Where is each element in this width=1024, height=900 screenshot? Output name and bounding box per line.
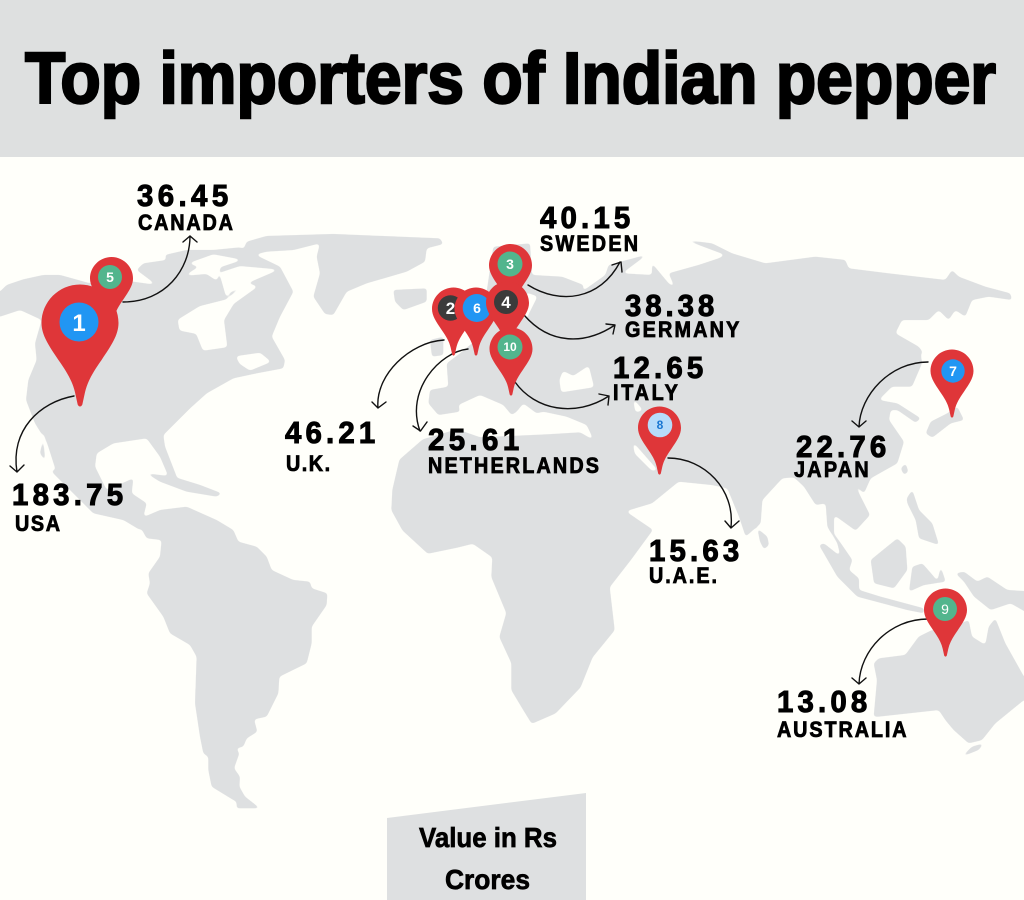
North America <box>0 234 443 530</box>
label: UK: 46.21 <box>285 416 375 450</box>
label: Netherlands <box>428 423 599 478</box>
label: Germany <box>625 289 739 342</box>
pin 3: Sweden: 3 <box>506 256 514 272</box>
pin 2: UK: 2 <box>446 299 455 318</box>
arrow: UK <box>372 340 444 408</box>
arrow: Netherlands <box>413 349 468 431</box>
arrow: UAE <box>668 458 739 528</box>
label: Italy: ITALY <box>613 381 678 405</box>
label: UAE <box>649 534 739 588</box>
arrow: Italy <box>515 382 609 409</box>
pin 4: Germany: 4 <box>501 293 511 312</box>
pin 6: Netherlands <box>454 288 498 356</box>
Eurasia <box>428 240 1012 613</box>
Iceland <box>393 288 427 310</box>
pin 4: Germany <box>486 282 529 350</box>
unit note <box>387 793 586 900</box>
label: Japan <box>794 430 886 482</box>
label: USA <box>12 478 123 536</box>
arrow: Australia <box>852 619 928 684</box>
label: Netherlands: NETHERLANDS <box>428 454 599 478</box>
pin 8: UAE <box>638 406 681 475</box>
pin 1: USA: 1 <box>72 310 86 337</box>
pin 5: Canada: 5 <box>106 269 114 285</box>
pin 2: UK <box>432 288 475 356</box>
arrow: USA <box>10 396 74 472</box>
label: UK <box>285 416 375 476</box>
Africa <box>392 430 652 723</box>
pin 6: Netherlands: 6 <box>473 300 481 316</box>
arrow: Japan <box>852 362 928 427</box>
arrow: Germany <box>524 315 615 339</box>
pin 7: Japan: 7 <box>949 363 957 379</box>
label: USA: USA <box>15 512 60 536</box>
label: Australia <box>777 685 907 742</box>
pin 9: Australia <box>924 588 967 657</box>
label: Australia: AUSTRALIA <box>777 718 907 742</box>
label: Canada: CANADA <box>138 211 233 235</box>
label: Germany: 38.38 <box>625 289 714 323</box>
arrow: Canada <box>123 236 197 302</box>
label: Japan: 22.76 <box>796 430 886 464</box>
label: UK: U.K. <box>286 452 330 476</box>
label: Germany: GERMANY <box>625 318 739 342</box>
pin 5: Canada <box>90 257 133 325</box>
unit note: Crores <box>445 864 530 895</box>
label: Japan: JAPAN <box>794 458 869 482</box>
label: Australia: 13.08 <box>777 685 867 719</box>
title banner <box>0 0 1024 157</box>
label: UAE: U.A.E. <box>649 564 717 588</box>
label: Sweden: SWEDEN <box>540 232 638 256</box>
pin 9: Australia: 9 <box>941 601 949 617</box>
label: UAE: 15.63 <box>649 534 739 568</box>
label: Sweden <box>540 201 638 256</box>
label: Italy: 12.65 <box>613 351 703 385</box>
label: Sweden: 40.15 <box>540 201 630 235</box>
pin 10: Italy <box>490 328 532 396</box>
label: USA: 183.75 <box>12 478 123 512</box>
Australia <box>874 618 1024 757</box>
pin 1: USA <box>41 284 118 407</box>
South America <box>137 507 327 808</box>
East Asian and Southeast Asian islands <box>757 407 1024 617</box>
arrow: Sweden <box>528 262 622 297</box>
pin 3: Sweden <box>489 244 532 312</box>
label: Italy <box>613 351 703 405</box>
pin 7: Japan <box>930 350 974 418</box>
pin 10: Italy: 10 <box>503 340 517 354</box>
label: Canada <box>137 179 233 235</box>
pin 8: UAE: 8 <box>657 418 664 432</box>
label: Canada: 36.45 <box>137 179 228 213</box>
world map <box>0 150 1024 870</box>
label: Netherlands: 25.61 <box>428 423 519 457</box>
unit note: Value in Rs <box>419 822 557 853</box>
